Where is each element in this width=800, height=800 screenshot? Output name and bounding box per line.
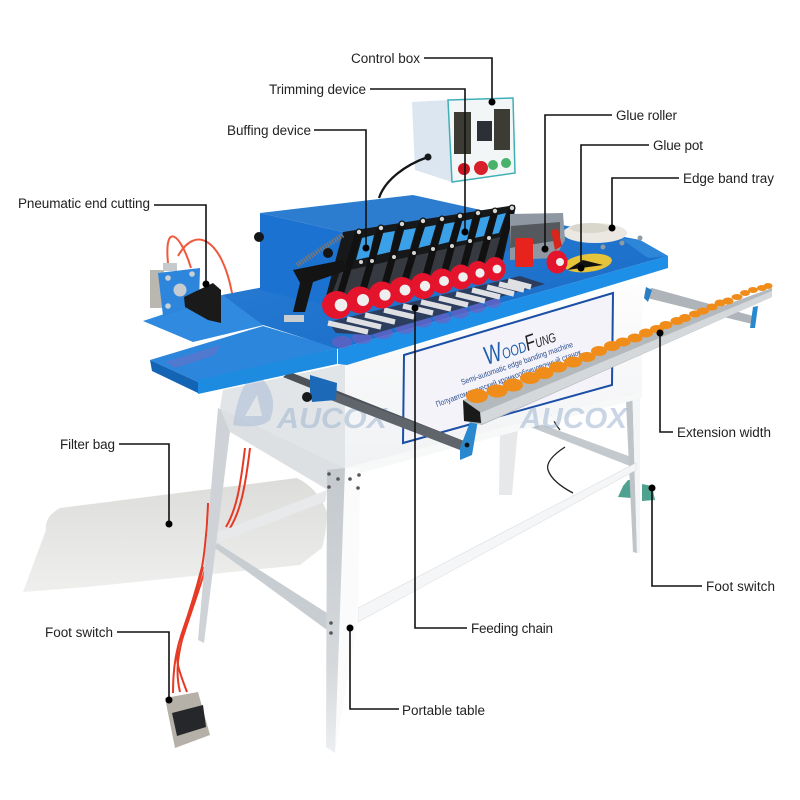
- callout: portable table: [346, 624, 485, 718]
- upper left table plate: [143, 295, 264, 342]
- watermark right: AUCOX: [519, 403, 629, 435]
- callout: filter bag: [60, 437, 172, 528]
- foot switch left: [165, 692, 210, 748]
- glue unit: [510, 213, 565, 267]
- callout: buffing device: Buffing device: [227, 123, 311, 138]
- glue roller: [546, 250, 568, 274]
- callout: pneumatic end cutting: Pneumatic end cutting: [18, 196, 150, 211]
- cabinet body: [220, 284, 642, 492]
- control box: [379, 98, 515, 198]
- callout: extension width: [656, 330, 771, 440]
- trimming brackets: [325, 205, 515, 305]
- WoodFung logo: WOODFUNG: [479, 318, 559, 371]
- left rear leg: [198, 408, 232, 643]
- watermark left: AUCOX: [276, 403, 389, 435]
- buffing arm and spring: [284, 235, 348, 322]
- foot switch right: [618, 480, 655, 501]
- filter bag: [23, 478, 327, 592]
- rear support rail: [644, 287, 758, 328]
- red rollers: [322, 257, 506, 319]
- glue pot: [563, 251, 613, 275]
- callout: extension width: Extension width: [677, 425, 771, 440]
- callout: glue roller: Glue roller: [616, 108, 678, 123]
- pneumatic end cutting unit: [150, 236, 232, 323]
- callout: foot switch right: Foot switch: [706, 579, 775, 594]
- lower left table plate: [150, 326, 337, 394]
- callout: control box: [351, 51, 496, 106]
- front corner leg: [326, 468, 361, 753]
- watermark left: [233, 374, 389, 435]
- callout: buffing device: [227, 123, 370, 252]
- extension roller rail: [463, 283, 772, 425]
- callout: pneumatic end cutting: [18, 196, 210, 288]
- callout: feeding chain: [412, 304, 553, 636]
- motor housing: [254, 195, 515, 310]
- callout: trimming device: Trimming device: [269, 82, 366, 97]
- callout: edge band tray: Edge band tray: [683, 171, 774, 186]
- power cable: [548, 410, 573, 493]
- callout: glue roller: [542, 108, 678, 252]
- conveyor feeding chain: [328, 276, 545, 335]
- back right leg and brace: [499, 420, 634, 495]
- right front leg: [625, 380, 640, 553]
- callout: portable table: Portable table: [402, 703, 485, 718]
- product label panel: [403, 293, 613, 443]
- callout: glue pot: [578, 138, 703, 272]
- machine name: Semi-automatic edge banding machine: [460, 340, 575, 387]
- cross braces: [215, 463, 636, 630]
- air hoses to foot switch: [173, 448, 250, 693]
- callout: filter bag: Filter bag: [60, 437, 115, 452]
- machine name russian: Полуавтоматический кромкооблицовочный станок: [435, 348, 583, 409]
- main table top: [222, 215, 668, 365]
- callout: control box: Control box: [351, 51, 420, 66]
- callout: foot switch left: Foot switch: [45, 625, 113, 640]
- edge band tray: [563, 223, 642, 250]
- callout: foot switch right: [648, 484, 775, 594]
- callout: trimming device: [269, 82, 468, 236]
- callout: glue pot: Glue pot: [653, 138, 703, 153]
- callout: edge band tray: [608, 171, 774, 232]
- callout: feeding chain: Feeding chain: [471, 621, 553, 636]
- front support rail: [283, 372, 478, 460]
- callout: foot switch left: [45, 625, 172, 704]
